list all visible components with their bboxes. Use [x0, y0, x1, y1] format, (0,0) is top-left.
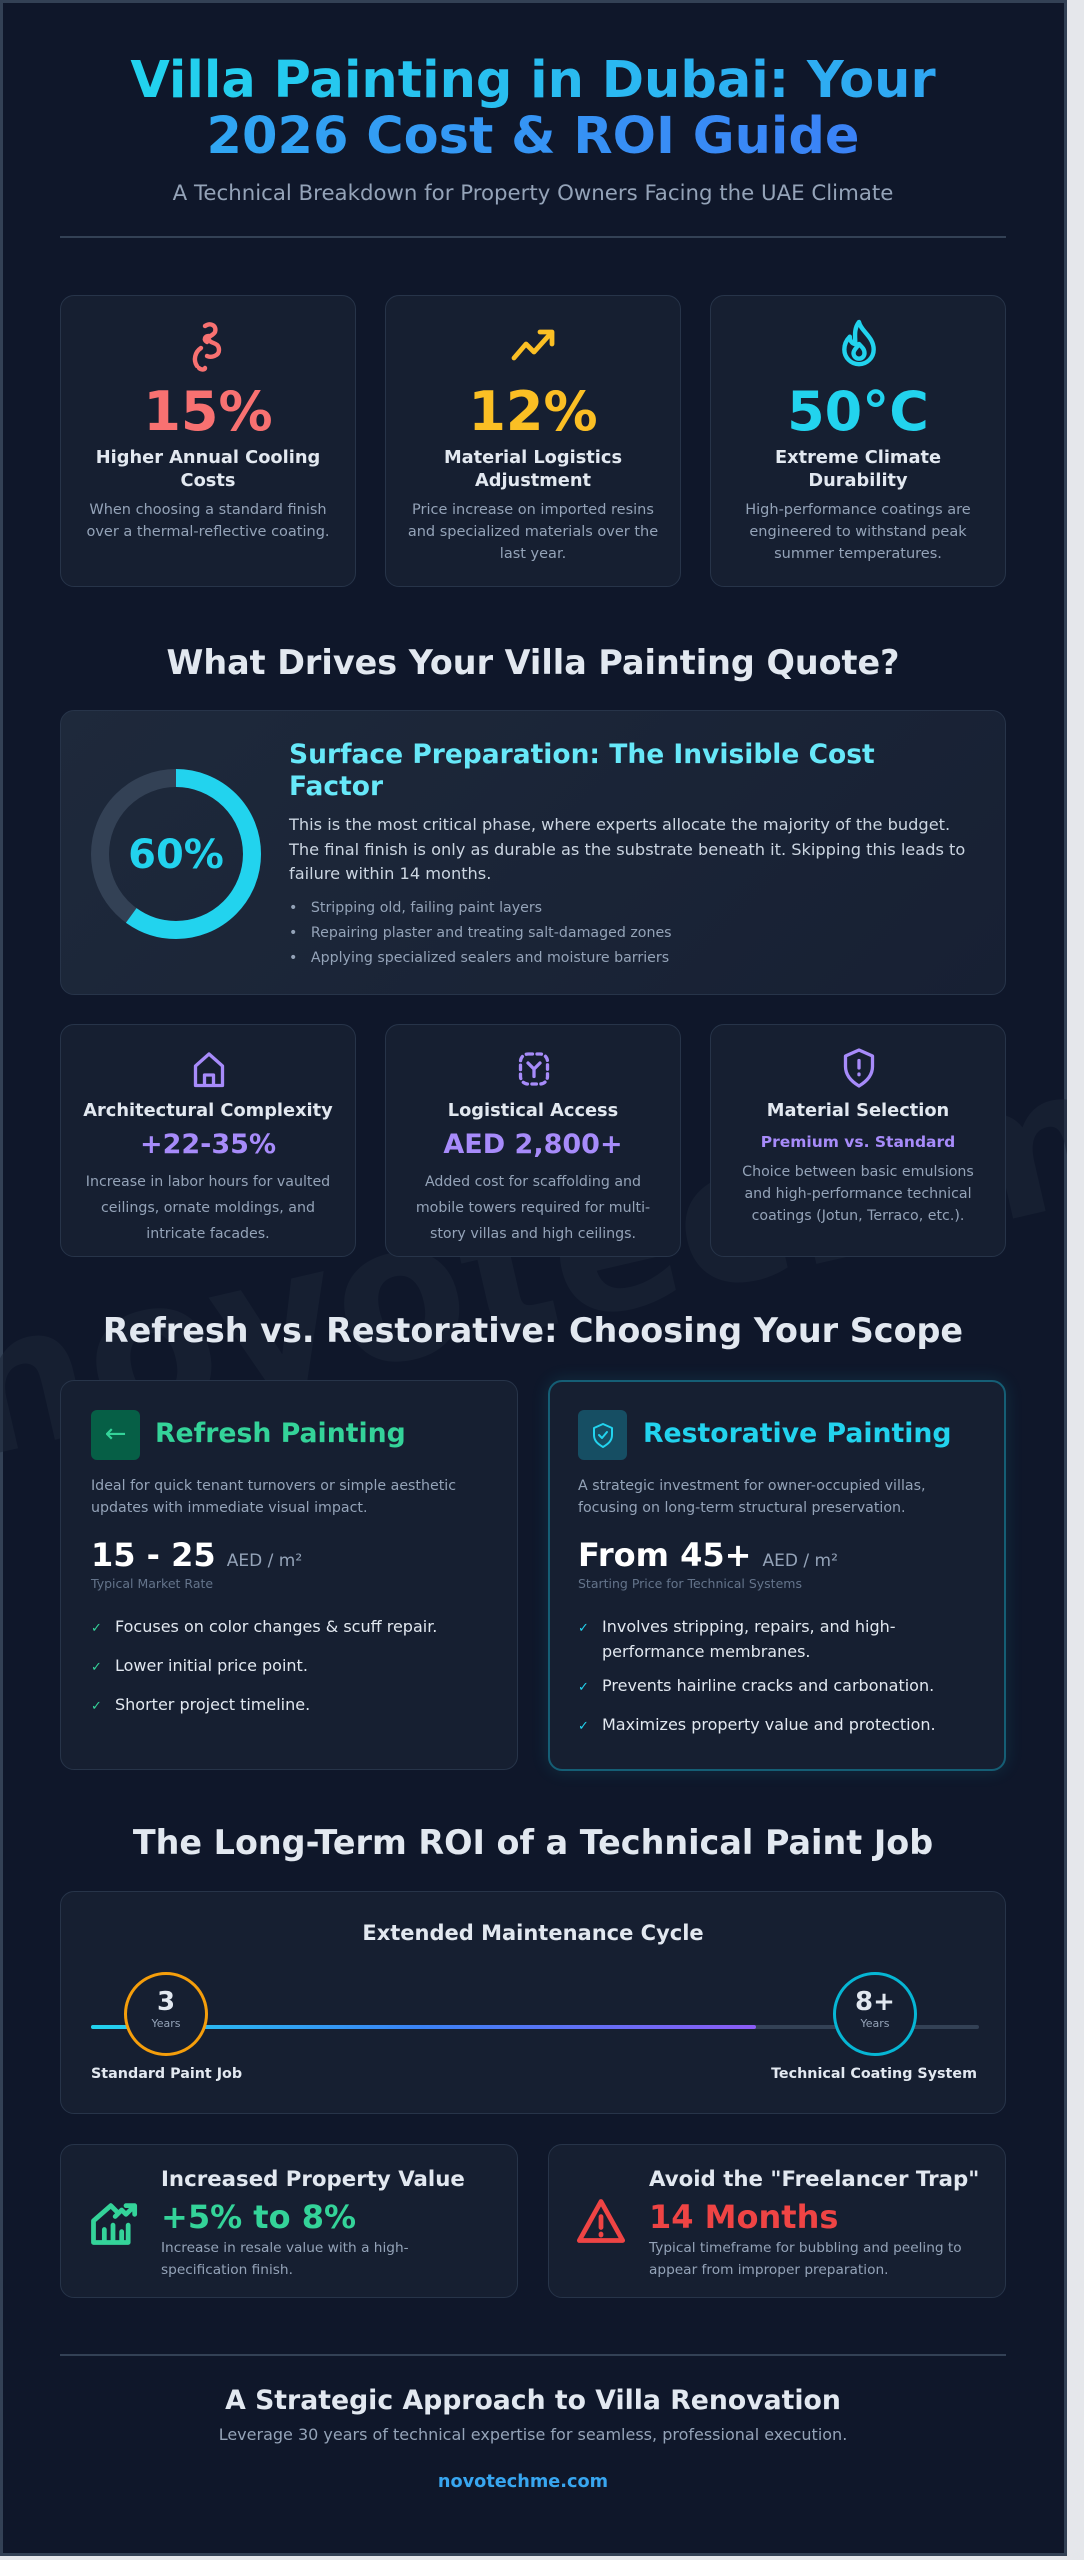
- paragraph: This is the most critical phase, where experts allocate the majority of the budget. The final finish is only as durable as the substrate beneath it. Skipping this leads to failure within 14 months.: [289, 815, 965, 883]
- bullet list: [289, 900, 672, 966]
- stat card: climate: Extreme Climate: [775, 447, 941, 468]
- stat card: cooling: When choosing a standard finish over a thermal-reflective coating.: [86, 502, 330, 540]
- panel: restorative painting: [548, 1380, 1006, 1771]
- factor card: logistical: Added cost for scaffolding and mobile towers required for multi-story villas and high ceilings.: [416, 1174, 650, 1242]
- title: 2026 Cost & ROI Guide: [206, 107, 860, 166]
- panel: refresh painting: Refresh Painting: [155, 1418, 406, 1449]
- heading: ROI: The Long-Term ROI of a Technical Paint Job: [133, 1823, 933, 1862]
- stat card: cooling: Costs: [181, 470, 235, 491]
- stat card: climate: High-performance coatings are engineered to withstand peak summer temperatures.: [745, 502, 971, 562]
- panel: restorative painting: Maximizes property value and protection.: [602, 1715, 936, 1734]
- panel: freelancer trap: Avoid the "Freelancer Trap": [649, 2167, 979, 2192]
- panel: property value: Increase in resale value with a high-specification finish.: [161, 2240, 409, 2278]
- factor card: material: Choice between basic emulsions and high-performance technical coatings (Jotun, Terraco, etc.).: [742, 1164, 974, 1224]
- factor card: architectural: [60, 1024, 356, 1257]
- panel: freelancer trap: 14 Months: [649, 2198, 838, 2236]
- panel: restorative painting: A strategic investment for owner-occupied villas, focusing on long-term structural preservation.: [578, 1478, 925, 1516]
- icon: flame: [842, 320, 876, 366]
- checklist: Involves stripping, repairs, and high-performance membranes.: [602, 1617, 896, 1661]
- checklist: ✓: [578, 1621, 589, 1636]
- stat card: logistics: Adjustment: [475, 470, 591, 491]
- bullet list: • Stripping old, failing paint layers: [289, 900, 542, 916]
- factor card: architectural: Increase in labor hours for vaulted ceilings, ornate moldings, and intricate facades.: [86, 1174, 330, 1242]
- panel: refresh painting: Ideal for quick tenant turnovers or simple aesthetic updates with immediate visual impact.: [91, 1478, 456, 1516]
- footer heading: A Strategic Approach to Villa Renovation: [225, 2385, 841, 2416]
- stat card: logistics: 12%: [468, 380, 598, 443]
- marker: 3 years: [124, 1972, 208, 2056]
- heading: Surface Preparation: The Invisible Cost Factor: [289, 739, 875, 802]
- factor card: material: Premium vs. Standard: [761, 1133, 955, 1151]
- panel: refresh painting: ✓: [91, 1660, 102, 1675]
- panel: restorative painting: ✓: [578, 1719, 589, 1734]
- footer link: novotechme.com: [438, 2472, 608, 2492]
- panel: property value: +5% to 8%: [161, 2198, 356, 2236]
- factor card: logistical: AED 2,800+: [443, 1129, 623, 1160]
- price: From 45+ AED / m²: [578, 1536, 838, 1574]
- donut chart 60%: 60%: [128, 832, 224, 878]
- marker: 8+ years: Years: [860, 2017, 890, 2030]
- panel: freelancer trap: [548, 2144, 1006, 2298]
- panel: maintenance cycle: [60, 1891, 1006, 2114]
- panel: maintenance cycle: Technical Coating System: [771, 2066, 977, 2082]
- panel: refresh painting: Lower initial price point.: [115, 1656, 308, 1675]
- stat card: climate: Durability: [808, 470, 908, 491]
- stat card: cooling: [60, 295, 356, 587]
- panel: restorative painting: ✓: [578, 1680, 589, 1695]
- panel: restorative painting: Prevents hairline cracks and carbonation.: [602, 1676, 934, 1695]
- heading: refresh vs restorative: Refresh vs. Restorative: Choosing Your Scope: [103, 1311, 963, 1350]
- marker: 8+ years: [833, 1972, 917, 2056]
- panel: property value: [60, 2144, 518, 2298]
- panel: maintenance cycle: Extended Maintenance Cycle: [362, 1921, 704, 1945]
- checklist: ✓: [91, 1621, 102, 1636]
- panel: refresh painting: Shorter project timeline.: [115, 1695, 310, 1714]
- heading: what drives: What Drives Your Villa Painting Quote?: [166, 643, 900, 682]
- panel: maintenance cycle: Standard Paint Job: [91, 2066, 242, 2082]
- factor card: logistical: Logistical Access: [448, 1100, 618, 1121]
- panel: freelancer trap: Typical timeframe for bubbling and peeling to appear from improper preparation.: [649, 2240, 962, 2278]
- title: Villa Painting in Dubai: Your: [130, 51, 936, 110]
- panel: restorative painting: Restorative Painting: [643, 1418, 952, 1449]
- icon: scaffolding: [518, 1052, 550, 1086]
- panel: surface preparation: [60, 710, 1006, 995]
- factor card: architectural: Architectural Complexity: [83, 1100, 333, 1121]
- stat card: climate: 50°C: [787, 380, 929, 443]
- panel: property value: Increased Property Value: [161, 2167, 465, 2192]
- panel: restorative painting: Starting Price for Technical Systems: [578, 1576, 802, 1591]
- footer text: Leverage 30 years of technical expertise for seamless, professional execution.: [219, 2425, 847, 2444]
- stat card: logistics: [385, 295, 681, 587]
- stat card: cooling: 15%: [143, 380, 273, 443]
- bullet list: • Repairing plaster and treating salt-damaged zones: [289, 925, 672, 941]
- factor card: material: [710, 1024, 1006, 1257]
- subtitle: A Technical Breakdown for Property Owners Facing the UAE Climate: [173, 181, 893, 206]
- icon: house growth: [91, 2203, 138, 2245]
- factor card: material: Material Selection: [767, 1100, 949, 1121]
- marker: 3 years: 3: [157, 1987, 175, 2017]
- icon: arrow box: [91, 1410, 140, 1460]
- icon: warning triangle: [576, 2199, 625, 2243]
- factor card: architectural: +22-35%: [140, 1129, 276, 1160]
- factor card: logistical: [385, 1024, 681, 1257]
- icon: trend up: [512, 330, 554, 360]
- stat card: logistics: Price increase on imported resins and specialized materials over the last year.: [408, 502, 658, 562]
- marker: 8+ years: 8+: [855, 1987, 895, 2017]
- stat card: logistics: Material Logistics: [444, 447, 622, 468]
- icon: thermometer: [192, 322, 222, 372]
- stat card: cooling: Higher Annual Cooling: [96, 447, 320, 468]
- panel: refresh painting: Typical Market Rate: [91, 1576, 213, 1591]
- title: [130, 51, 936, 166]
- icon: arrow box: ←: [105, 1419, 126, 1449]
- timeline bar: [91, 2025, 979, 2029]
- marker: 3 years: Years: [151, 2017, 181, 2030]
- icon: house: [194, 1052, 224, 1088]
- price: 15 - 25 AED / m²: [91, 1536, 302, 1574]
- checklist: Focuses on color changes & scuff repair.: [115, 1617, 437, 1636]
- panel: refresh painting: [60, 1380, 518, 1770]
- icon: shield box: [578, 1410, 627, 1460]
- stat card: climate: [710, 295, 1006, 587]
- donut chart 60%: [91, 769, 261, 939]
- bullet list: • Applying specialized sealers and moisture barriers: [289, 950, 669, 966]
- icon: shield alert: [844, 1048, 874, 1088]
- panel: refresh painting: ✓: [91, 1699, 102, 1714]
